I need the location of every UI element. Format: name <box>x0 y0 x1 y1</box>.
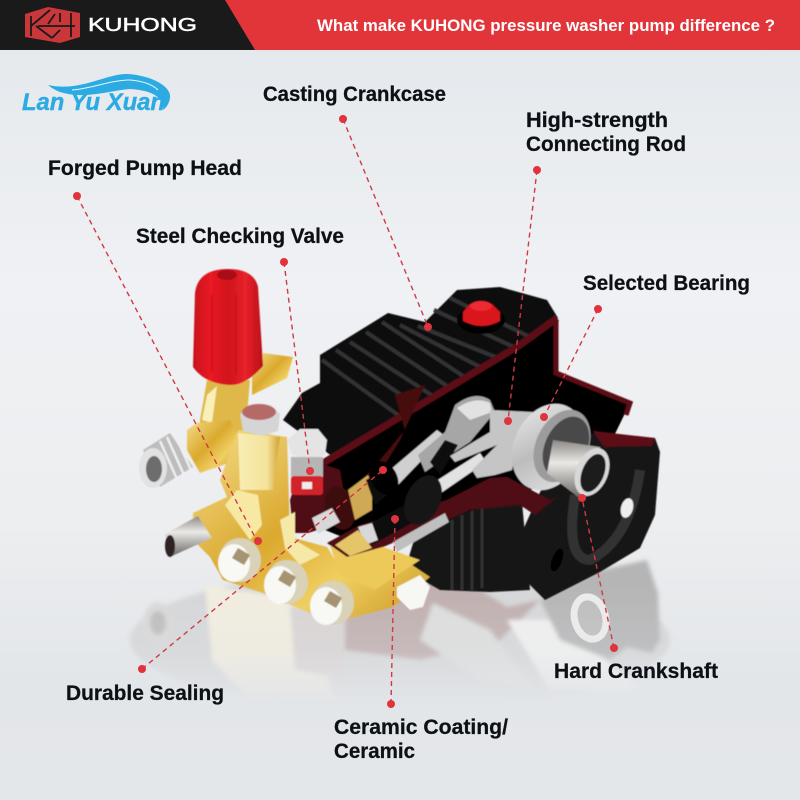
wordmark: KUHONG <box>88 15 197 35</box>
callout: Forged Pump Head: Forged Pump Head <box>48 157 242 180</box>
callout: Steel Checking Valve: Steel Checking Valve <box>136 225 344 248</box>
side arm <box>252 353 293 395</box>
callout: Ceramic Coating: Ceramic <box>334 740 415 763</box>
icon: inlet pipe <box>165 516 212 557</box>
icon: plug 2 <box>264 560 308 604</box>
stem <box>200 380 250 460</box>
panel: seal and plunger parts <box>312 456 449 556</box>
callout: Durable Sealing <box>66 466 387 705</box>
panel: brass manifold <box>165 404 430 625</box>
icon: top hex bolt <box>240 404 280 436</box>
callout: Casting Crankcase: Casting Crankcase <box>263 83 446 106</box>
callout: Selected Bearing: Selected Bearing <box>583 272 750 295</box>
icon: plug 1 <box>218 538 261 582</box>
pump reflection <box>130 558 670 678</box>
wordmark: Lan Yu Xuan <box>22 89 165 116</box>
Lan Yu Xuan logo <box>22 74 170 116</box>
callout: High-strength Connecting Rod: High-strength <box>526 109 668 132</box>
crankshaft <box>547 440 608 497</box>
callout: Ceramic Coating <box>334 515 508 763</box>
callout: Hard Crankshaft <box>554 494 718 683</box>
callout: High-strength Connecting Rod: Connecting Rod <box>526 133 686 156</box>
icon: threaded outlet <box>139 433 193 488</box>
icon: red oil cap <box>457 301 505 334</box>
panel: pressure valve with red cap <box>139 269 293 488</box>
panel: lower fins <box>405 480 530 592</box>
callout: Selected Bearing <box>540 272 750 421</box>
icon: plug 3 <box>310 581 354 625</box>
icon: valve plug <box>287 429 327 495</box>
icon: red adjusting cap <box>193 269 263 385</box>
pump illustration <box>139 269 660 625</box>
panel: connecting rod and pistons <box>390 396 533 495</box>
panel: crankcase top with cooling fins <box>283 287 558 457</box>
callout: Durable Sealing: Durable Sealing <box>66 682 224 705</box>
callout: Hard Crankshaft: Hard Crankshaft <box>554 660 718 683</box>
connector <box>187 420 237 473</box>
callout: Steel Checking Valve <box>136 225 344 475</box>
icon: wave <box>48 74 170 110</box>
bearing <box>498 392 598 502</box>
header title: What make KUHONG pressure washer pump difference ? <box>317 17 775 35</box>
KUHONG logo <box>25 7 197 43</box>
callout: Ceramic Coating: Ceramic Coating/ <box>334 716 508 739</box>
callout: High-strength Connecting Rod <box>504 109 686 425</box>
panel: bearing and crankshaft <box>498 392 616 502</box>
icon: KH mark <box>25 7 80 43</box>
icon: plug 4 <box>397 575 430 610</box>
panel: interior section <box>290 318 655 557</box>
callout: Forged Pump Head <box>48 157 262 545</box>
callout: Casting Crankcase <box>263 83 446 331</box>
panel: flange plate <box>523 420 660 600</box>
header bar <box>0 0 800 50</box>
